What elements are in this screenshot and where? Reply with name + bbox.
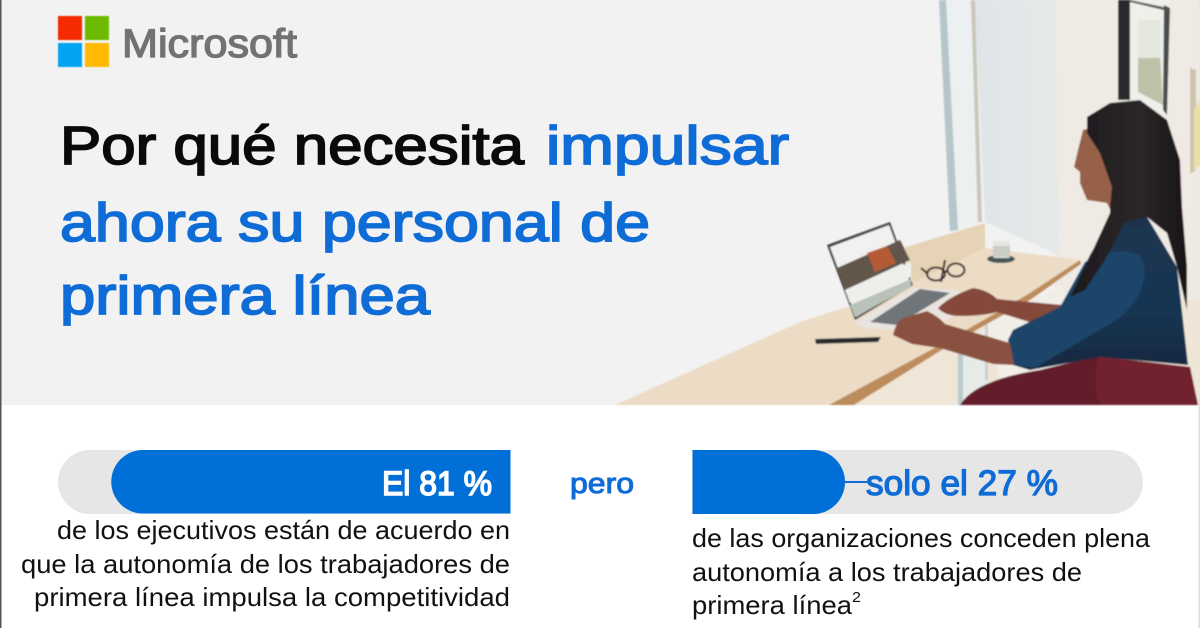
left description: que la autonomía de los trabajadores de <box>21 549 510 579</box>
laptop <box>827 222 973 330</box>
connector word: pero: pero <box>570 468 634 500</box>
bar track <box>58 450 510 514</box>
left description: de los ejecutivos están de acuerdo en <box>57 515 510 545</box>
title line 1 blue: impulsar <box>546 116 789 176</box>
hair <box>1070 100 1187 310</box>
right description <box>692 523 1151 620</box>
near arm and hand <box>893 311 1014 365</box>
bar fill <box>111 450 510 514</box>
logo squares <box>58 16 109 67</box>
title line 1 black: Por qué necesita <box>60 116 525 176</box>
title line 3: primera línea <box>60 266 431 326</box>
bar track <box>692 450 1143 514</box>
torso and sleeve <box>1008 217 1188 370</box>
neck and face <box>1074 125 1120 213</box>
logo: Microsoft <box>58 16 297 67</box>
left description <box>21 515 510 612</box>
trousers <box>960 356 1198 405</box>
right description: primera línea <box>692 590 853 620</box>
glasses <box>921 260 964 282</box>
wooden desk <box>615 223 1081 405</box>
right stat: 27 % bar <box>692 450 1143 514</box>
right description: 2 <box>852 589 861 606</box>
logo wordmark: Microsoft <box>122 22 297 66</box>
left stat: 81 % bar <box>58 450 510 514</box>
far arm and hand <box>938 288 1062 329</box>
title <box>60 116 789 326</box>
coffee cup and coaster <box>987 241 1015 263</box>
wall picture <box>1118 0 1200 174</box>
title line 2: ahora su personal de <box>60 193 650 253</box>
bar label: solo el 27 % <box>866 464 1058 503</box>
photo: woman working at laptop by a window <box>615 0 1200 405</box>
window and wall <box>852 0 1200 405</box>
bar label: El 81 % <box>382 465 492 503</box>
connector line <box>845 481 867 483</box>
woman <box>893 100 1198 405</box>
bar fill <box>692 450 845 514</box>
right description: autonomía a los trabajadores de <box>692 557 1082 587</box>
left description: primera línea impulsa la competitividad <box>34 582 510 612</box>
right description: de las organizaciones conceden plena <box>692 523 1151 553</box>
pen <box>815 337 881 344</box>
